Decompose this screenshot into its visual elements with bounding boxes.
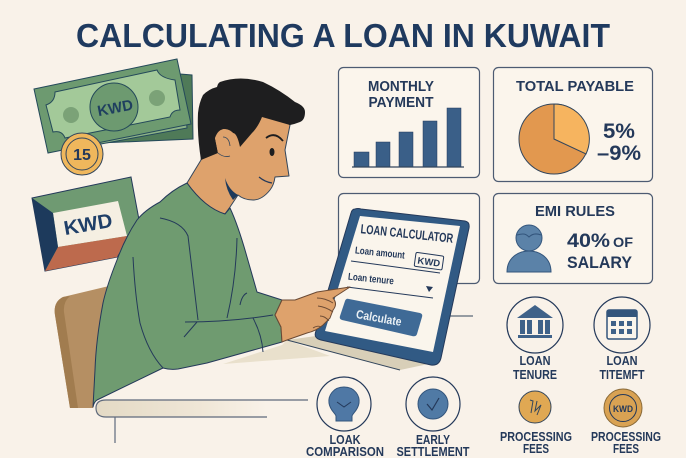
icon: loan tenure bank: [507, 297, 563, 353]
label: loak comparison: [306, 433, 384, 458]
panel: EMI rules: EMI RULES: [535, 203, 615, 220]
panel: monthly payment: MONTHLY: [368, 79, 434, 95]
icon: coin 15: [61, 133, 103, 175]
icon: loan comparison: [317, 377, 371, 431]
label: early settlement: [396, 433, 470, 458]
icon: Kuwait flag card: [32, 177, 140, 271]
label: loan titemft: TITEMFT: [600, 368, 645, 382]
ear: [215, 129, 239, 157]
panel: total payable: –9%: [597, 142, 641, 165]
face and neck: [187, 100, 290, 214]
panel: blank card behind tablet: [338, 194, 480, 284]
KWD box: [414, 252, 444, 270]
bar chart: [352, 108, 464, 167]
label: processing fees two: FEES: [613, 442, 639, 456]
neck shadow: [225, 178, 238, 200]
panel: monthly payment: PAYMENT: [368, 95, 434, 111]
label: loan tenure: TENURE: [513, 368, 557, 382]
title: CALCULATING A LOAN IN KUWAIT: [76, 17, 610, 54]
tablet: Loan amount: [354, 245, 406, 262]
panel: EMI rules: SALARY: [567, 254, 632, 272]
hair: [198, 78, 305, 160]
sweater: [93, 183, 282, 407]
icon: Kuwait flag card: KWD: [62, 210, 114, 240]
pie chart: [519, 104, 589, 174]
calculate button: Calculate: [355, 307, 403, 329]
icon: person: [507, 225, 551, 272]
eyebrow: [266, 135, 283, 141]
panel: EMI rules: OF: [613, 234, 633, 250]
label: processing fees one: PROCESSING: [500, 430, 572, 444]
panel: total payable: 5%: [603, 120, 635, 143]
panel: total payable: [494, 68, 652, 182]
tablet text: LOAN CALCULATOR: [360, 221, 454, 246]
icon: banknotes: KWD: [96, 97, 135, 120]
label: processing fees two: PROCESSING: [591, 430, 661, 444]
icon: coin 15: 15: [73, 147, 91, 164]
label: processing fees one: [500, 430, 572, 456]
calculate button: [340, 299, 422, 336]
tablet: [315, 208, 469, 365]
label: processing fees two: [591, 430, 661, 456]
desk: [96, 316, 473, 443]
icon: processing fee coin arrows: [519, 391, 551, 423]
eye: [270, 148, 274, 156]
label: early settlement: EARLY: [416, 433, 451, 447]
tablet: Loan tenure: [347, 272, 395, 287]
icon: KWD coin: [604, 389, 642, 427]
label: processing fees one: FEES: [523, 442, 549, 456]
KWD box: KWD: [417, 256, 441, 270]
smile: [259, 177, 272, 183]
icon: early settlement: [406, 377, 460, 431]
label: loan titemft: [600, 354, 645, 382]
panel: EMI rules: [494, 194, 652, 284]
hand pointing at tablet: [275, 287, 350, 342]
sweater folds: [133, 218, 273, 368]
panel: monthly payment: [338, 68, 480, 178]
label: loak comparison: LOAK: [330, 433, 360, 447]
panel: EMI rules: 40%: [567, 231, 610, 252]
panel: total payable: TOTAL PAYABLE: [516, 79, 634, 95]
chair: [55, 286, 109, 408]
icon: calendar: [594, 297, 650, 353]
label: loan tenure: [513, 354, 557, 382]
icon: banknotes: [34, 59, 193, 153]
label: loan tenure: LOAN: [520, 354, 550, 368]
person: [93, 78, 305, 407]
icon: KWD coin: KWD: [613, 404, 633, 415]
label: loan titemft: LOAN: [606, 354, 638, 368]
